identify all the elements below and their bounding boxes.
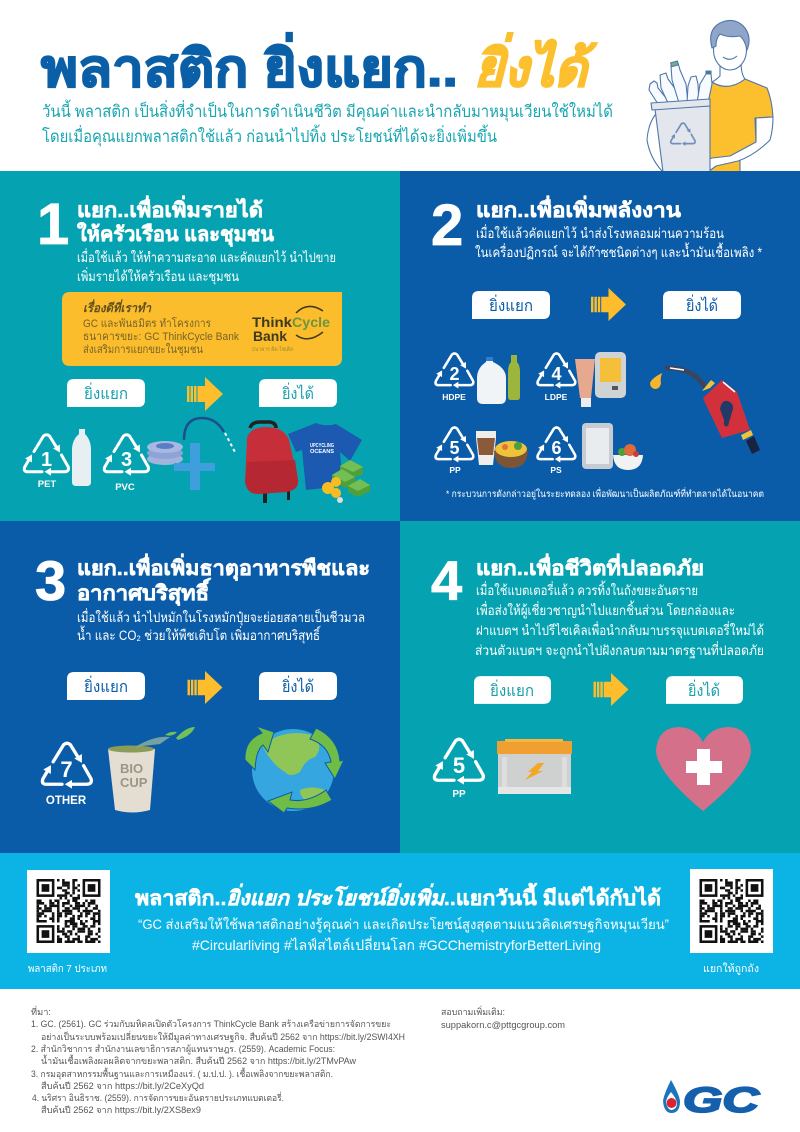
label: more sorting	[474, 676, 551, 704]
label: more gain	[666, 676, 743, 704]
icon: coffee cup and bowl	[476, 431, 528, 468]
recycling code 4 LDPE: 4	[551, 364, 562, 384]
body text 3: เมื่อใช้แล้ว นำไปหมักในโรงหมักปุ๋ยจะย่อยสลายเป็นชีวมวล	[77, 608, 365, 626]
logo: GC	[663, 1080, 760, 1120]
contact: suppakorn.c@pttgcgroup.com	[441, 1020, 565, 1030]
recycling code 2 HDPE	[436, 353, 473, 402]
recycling code 7 OTHER	[42, 743, 91, 807]
recycling code 1 PET: 1	[41, 449, 52, 471]
face	[714, 30, 746, 70]
number 3: 3	[35, 549, 66, 612]
QR code left	[27, 870, 110, 953]
logo: ThinkCycle Bank: ธนาคาร คิด-ไซเคิล	[252, 346, 293, 353]
arrow	[594, 673, 628, 706]
heading 1: ให้ครัวเรือน และชุมชน	[77, 222, 274, 247]
recycling code 1 PET	[24, 435, 69, 490]
QR caption right: แยกให้ถูกถัง	[703, 962, 759, 975]
recycling code 4 LDPE: LDPE	[545, 392, 568, 402]
body text 3: น้ำ และ CO₂ ช่วยให้พืชเติบโต เพิ่มอากาศบริสุทธิ์	[77, 625, 322, 644]
references: 3. กรมอุตสาหกรรมพื้นฐานและการเหมืองแร่. ( ม.ป.ป. ). เชื้อเพลิงจากขยะพลาสติก.	[31, 1067, 333, 1080]
body text 1: เมื่อใช้แล้ว ให้ทำความสะอาด และคัดแยกไว้ นำไปขาย	[77, 248, 336, 265]
logo: ThinkCycle Bank: Cycle	[292, 314, 330, 330]
callout: ThinkCycle Bank: ส่งเสริมการแยกขยะในชุมชน	[83, 343, 203, 356]
label: more gain: ยิ่งได้	[282, 675, 314, 696]
recycling code 3 PVC: PVC	[115, 482, 135, 493]
recycling code 5 PP	[434, 739, 483, 800]
call-to-action banner	[0, 853, 800, 989]
recycling code 4 LDPE	[538, 353, 575, 402]
icon: blue t-shirt	[288, 423, 362, 490]
recycling code 3 PVC	[104, 435, 149, 493]
references: 1. GC. (2561). GC ร่วมกับมหิดลเปิดตัวโครงการ ThinkCycle Bank สร้างเครือข่ายการจัดการขยะ	[31, 1019, 391, 1029]
icon: car battery	[497, 739, 572, 794]
body text 2: เมื่อใช้แล้วคัดแยกไว้ นำส่งโรงหลอมผ่านความร้อน	[476, 224, 724, 241]
callout: ThinkCycle Bank: เรื่องดีที่เราทำ	[83, 299, 152, 315]
body text 4	[475, 580, 764, 659]
icon: foam tray and salad bowl	[582, 423, 643, 470]
title: พลาสติก ยิ่งแยก..	[41, 33, 458, 97]
body text 4: เพื่อส่งให้ผู้เชี่ยวชาญนำไปแยกชิ้นส่วน โดยกล่องและ	[476, 600, 735, 619]
heading 3: อากาศบริสุทธิ์	[77, 577, 211, 606]
recycling code 5 PP: 5	[449, 438, 460, 458]
references	[31, 1005, 405, 1115]
heading 1: แยก..เพื่อเพิ่มรายได้	[77, 195, 263, 222]
recycling code 5 PP: 5	[453, 753, 465, 778]
recycling code 6 PS: PS	[550, 465, 562, 475]
contact	[441, 1005, 565, 1030]
label: more sorting	[67, 672, 145, 700]
references: สืบค้นปี 2562 จาก https://bit.ly/2CeXyQd	[41, 1081, 204, 1091]
icon: bio cup with leaves: BIO	[120, 761, 143, 776]
heading 3: แยก..เพื่อเพิ่มธาตุอาหารพืชและ	[77, 553, 370, 581]
number 2: 2	[431, 193, 463, 258]
hair	[711, 20, 749, 50]
recycling code 2 HDPE: HDPE	[442, 392, 466, 402]
logo: GC: GC	[683, 1081, 760, 1120]
recycling code 6 PS	[538, 427, 575, 475]
recycling code 2 HDPE: 2	[449, 364, 460, 384]
recycling code 1 PET: PET	[38, 479, 56, 490]
icon: milk jug and bottle	[477, 355, 520, 404]
recycling code 5 PP: PP	[449, 465, 461, 475]
recycling code 5 PP	[436, 427, 473, 475]
banner quote: “GC ส่งเสริมให้ใช้พลาสติกอย่างรู้คุณค่า และเกิดประโยชน์สูงสุดตามแนวคิดเศรษฐกิจหมุนเวียน”	[138, 916, 669, 933]
arrow	[187, 377, 223, 411]
icon: money and coins	[322, 460, 370, 503]
body text 1	[77, 248, 336, 285]
body text 4: ส่วนตัวแบตฯ จะถูกนำไปฝังกลบตามมาตรฐานที่ปลอดภัย	[475, 641, 764, 659]
icon: tube and cheese tray	[575, 352, 626, 407]
references: อย่างเป็นระบบพร้อมเปลี่ยนขยะให้มีมูลค่าทางเศรษฐกิจ. สืบค้นปี 2562 จาก https://bit.ly/2SWI4XH	[41, 1030, 405, 1043]
logo: ThinkCycle Bank: Bank	[253, 328, 287, 344]
label: more gain: ยิ่งได้	[282, 382, 314, 403]
footnote: * กระบวนการดังกล่าวอยู่ในระยะทดลอง เพื่อพัฒนาเป็นผลิตภัณฑ์ที่ทำตลาดได้ในอนาคต	[446, 487, 764, 500]
body text 2	[475, 224, 763, 260]
left arm behind bin	[647, 112, 668, 171]
arrow	[188, 671, 222, 704]
label: more sorting: ยิ่งแยก	[489, 294, 533, 315]
recycling code 7 OTHER: OTHER	[46, 795, 87, 807]
shirt	[706, 79, 773, 172]
hashtags: #Circularliving #ไลฟ์สไตล์เปลี่ยนโลก #GCChemistryforBetterLiving	[192, 936, 601, 953]
heading 3	[77, 553, 370, 606]
label: more gain: ยิ่งได้	[688, 679, 720, 700]
panel 2: energy	[400, 171, 800, 521]
icon: bio cup with leaves	[108, 727, 195, 812]
intro text	[42, 99, 613, 147]
heading 2: แยก..เพื่อเพิ่มพลังงาน	[476, 195, 681, 222]
header	[41, 20, 773, 172]
bin	[655, 106, 710, 172]
banner headline: พลาสติก..ยิ่งแยก ประโยชน์ยิ่งเพิ่ม ..แยกวันนี้ มีแต่ได้กับได้	[135, 882, 661, 910]
callout: ThinkCycle Bank: GC และพันธมิตร ทำโครงการ	[83, 316, 211, 330]
icon: earth with recycling arrows	[245, 726, 344, 813]
neck	[712, 62, 745, 86]
QR caption left: พลาสติก 7 ประเภท	[28, 963, 107, 975]
logo: ThinkCycle Bank	[252, 306, 330, 353]
panel 3: nutrients and clean air	[0, 521, 400, 853]
references: 2. สำนักวิชาการ สำนักงานเลขาธิการสภาผู้แทนราษฎร. (2559). Academic Focus:	[31, 1044, 335, 1055]
icon: blue t-shirt: UPCYCLING	[310, 443, 334, 449]
references: น้ำมันเชื้อเพลิงผลผลิตจากขยะพลาสติก. สืบค้นปี 2562 จาก https://bit.ly/2TMvPAw	[41, 1054, 356, 1066]
contact: สอบถามเพิ่มเติม:	[441, 1005, 505, 1017]
recycling code 7 OTHER: 7	[60, 757, 73, 782]
label: more sorting: ยิ่งแยก	[84, 675, 128, 696]
label: more sorting: ยิ่งแยก	[84, 382, 128, 403]
icon: PVC pipes	[147, 418, 236, 490]
QR code right	[690, 869, 773, 953]
number 4: 4	[431, 549, 462, 612]
number 1: 1	[37, 192, 69, 257]
panel 4: safe life	[400, 521, 800, 853]
callout: ThinkCycle Bank: ธนาคารขยะ: GC ThinkCycle Bank	[83, 331, 239, 343]
heading 4: แยก..เพื่อชีวิตที่ปลอดภัย	[476, 553, 704, 580]
body text 1: เพิ่มรายได้ให้ครัวเรือน และชุมชน	[77, 267, 239, 285]
icon: fuel nozzle	[650, 368, 760, 454]
arrow	[591, 288, 626, 321]
logo: ThinkCycle Bank: Think	[252, 314, 292, 330]
label: more sorting	[472, 291, 550, 319]
label: more gain	[259, 379, 337, 407]
body text 3	[77, 608, 365, 644]
icon: water bottle	[72, 429, 91, 486]
body text 4: เมื่อใช้แบตเตอรี่แล้ว ควรทิ้งในถังขยะอันตราย	[476, 580, 698, 598]
illustration: man holding recycling bin	[647, 20, 773, 172]
references: สืบค้นปี 2562 จาก https://bit.ly/2XS8ex9	[41, 1105, 201, 1115]
recycling code 6 PS: 6	[551, 438, 562, 458]
intro text: โดยเมื่อคุณแยกพลาสติกใช้แล้ว ก่อนนำไปทิ้ง ประโยชน์ที่ได้จะยิ่งเพิ่มขึ้น	[42, 124, 497, 147]
label: more sorting: ยิ่งแยก	[490, 679, 534, 700]
label: more gain	[259, 672, 337, 700]
icon: heart with plus	[656, 727, 751, 811]
recycling code 5 PP: PP	[452, 789, 466, 800]
references: 4. นริศรา อินธิราช. (2559). การจัดการขยะอันตรายประเภทแบตเตอรี่.	[32, 1091, 284, 1103]
title	[41, 32, 597, 97]
bottles	[649, 81, 670, 104]
label: more gain: ยิ่งได้	[686, 294, 718, 315]
icon: bio cup with leaves: CUP	[120, 775, 148, 790]
icon: blue t-shirt: OCEANS	[310, 449, 334, 455]
icon: red backpack	[245, 422, 298, 503]
heading 1	[77, 195, 274, 247]
callout: ThinkCycle Bank	[62, 292, 342, 366]
label: more sorting	[67, 379, 145, 407]
references: ที่มา:	[31, 1005, 51, 1017]
label: more gain	[663, 291, 741, 319]
intro text: วันนี้ พลาสติก เป็นสิ่งที่จำเป็นในการดำเนินชีวิต มีคุณค่าและนำกลับมาหมุนเวียนใช้ใหม่ได้	[42, 99, 613, 122]
title: ยิ่งได้	[474, 32, 597, 97]
right arm	[704, 117, 773, 172]
recycling code 3 PVC: 3	[121, 449, 132, 471]
panel 1: income	[0, 171, 400, 521]
